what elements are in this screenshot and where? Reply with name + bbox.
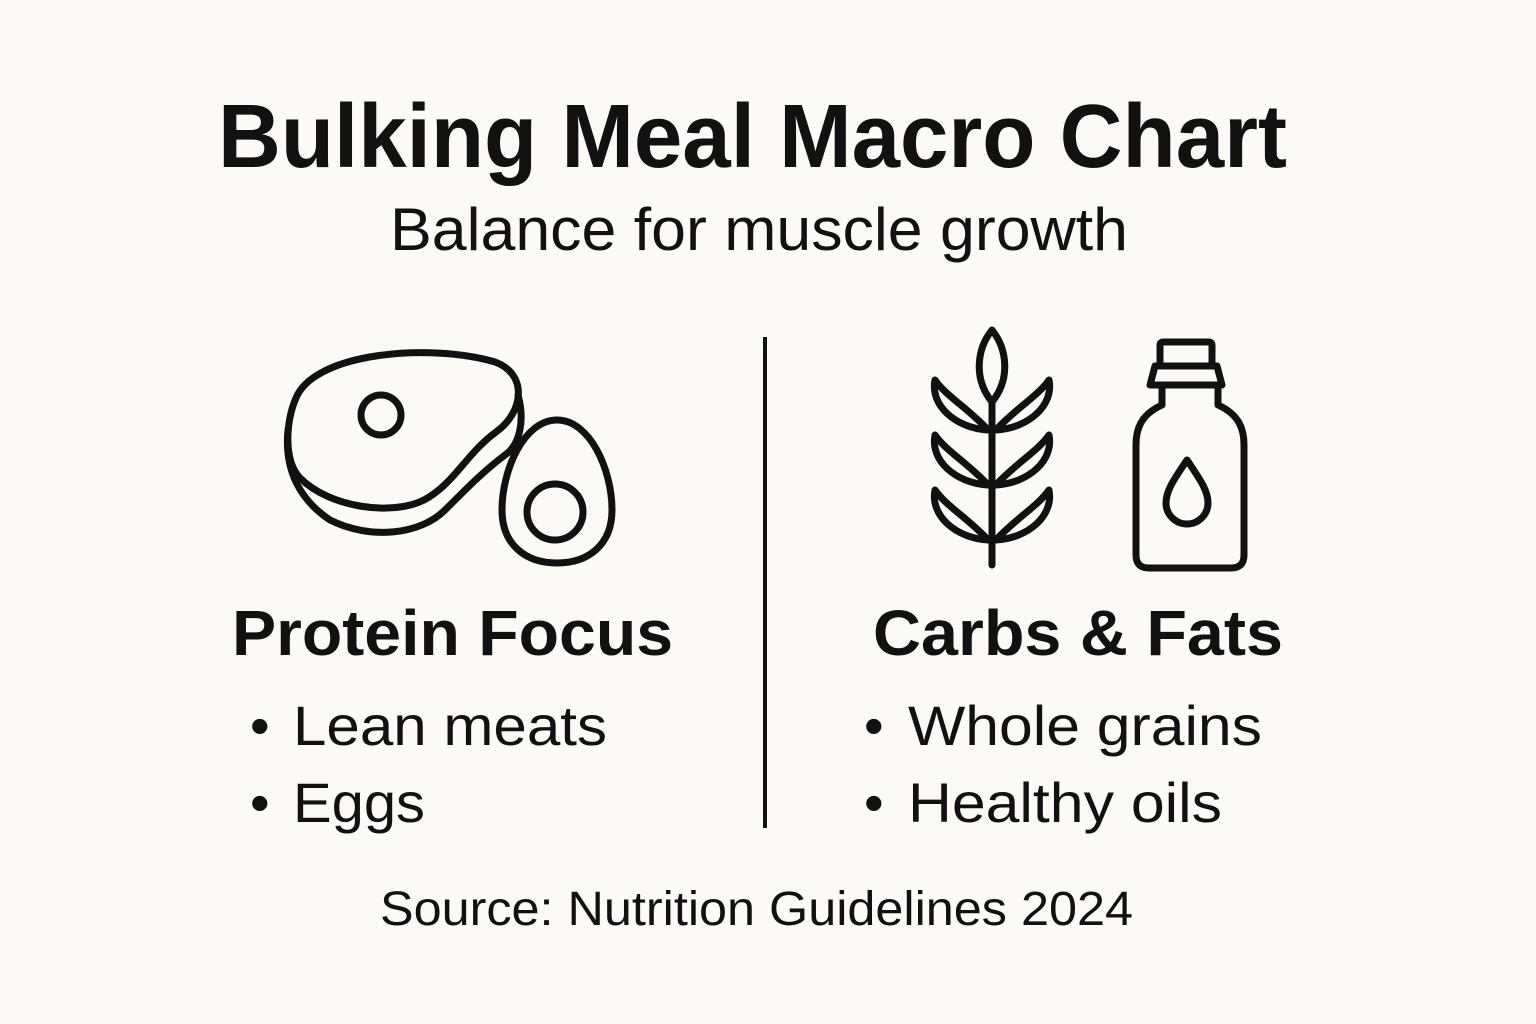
icon: wheat — [934, 330, 1050, 565]
heading: carbs & fats: Carbs & Fats — [873, 597, 1283, 669]
list: carbs & fats: • — [864, 694, 884, 757]
list: protein: Eggs — [293, 771, 425, 834]
list: protein: • — [250, 694, 270, 757]
icon: oil bottle — [1136, 342, 1244, 568]
list: carbs & fats: Healthy oils — [908, 771, 1222, 834]
list: carbs & fats: Whole grains — [908, 694, 1262, 757]
icon: egg — [502, 420, 612, 563]
list: carbs & fats: • — [864, 771, 884, 834]
icon: steak — [287, 353, 521, 532]
list: protein: Lean meats — [293, 694, 607, 757]
source: Source: Nutrition Guidelines 2024 — [380, 883, 1133, 936]
title: Bulking Meal Macro Chart — [218, 87, 1287, 187]
list: carbs & fats — [864, 694, 1262, 834]
list: protein — [250, 694, 607, 834]
list: protein: • — [250, 771, 270, 834]
divider — [763, 337, 767, 828]
subtitle: Balance for muscle growth — [390, 196, 1128, 263]
heading: protein focus: Protein Focus — [232, 597, 673, 669]
